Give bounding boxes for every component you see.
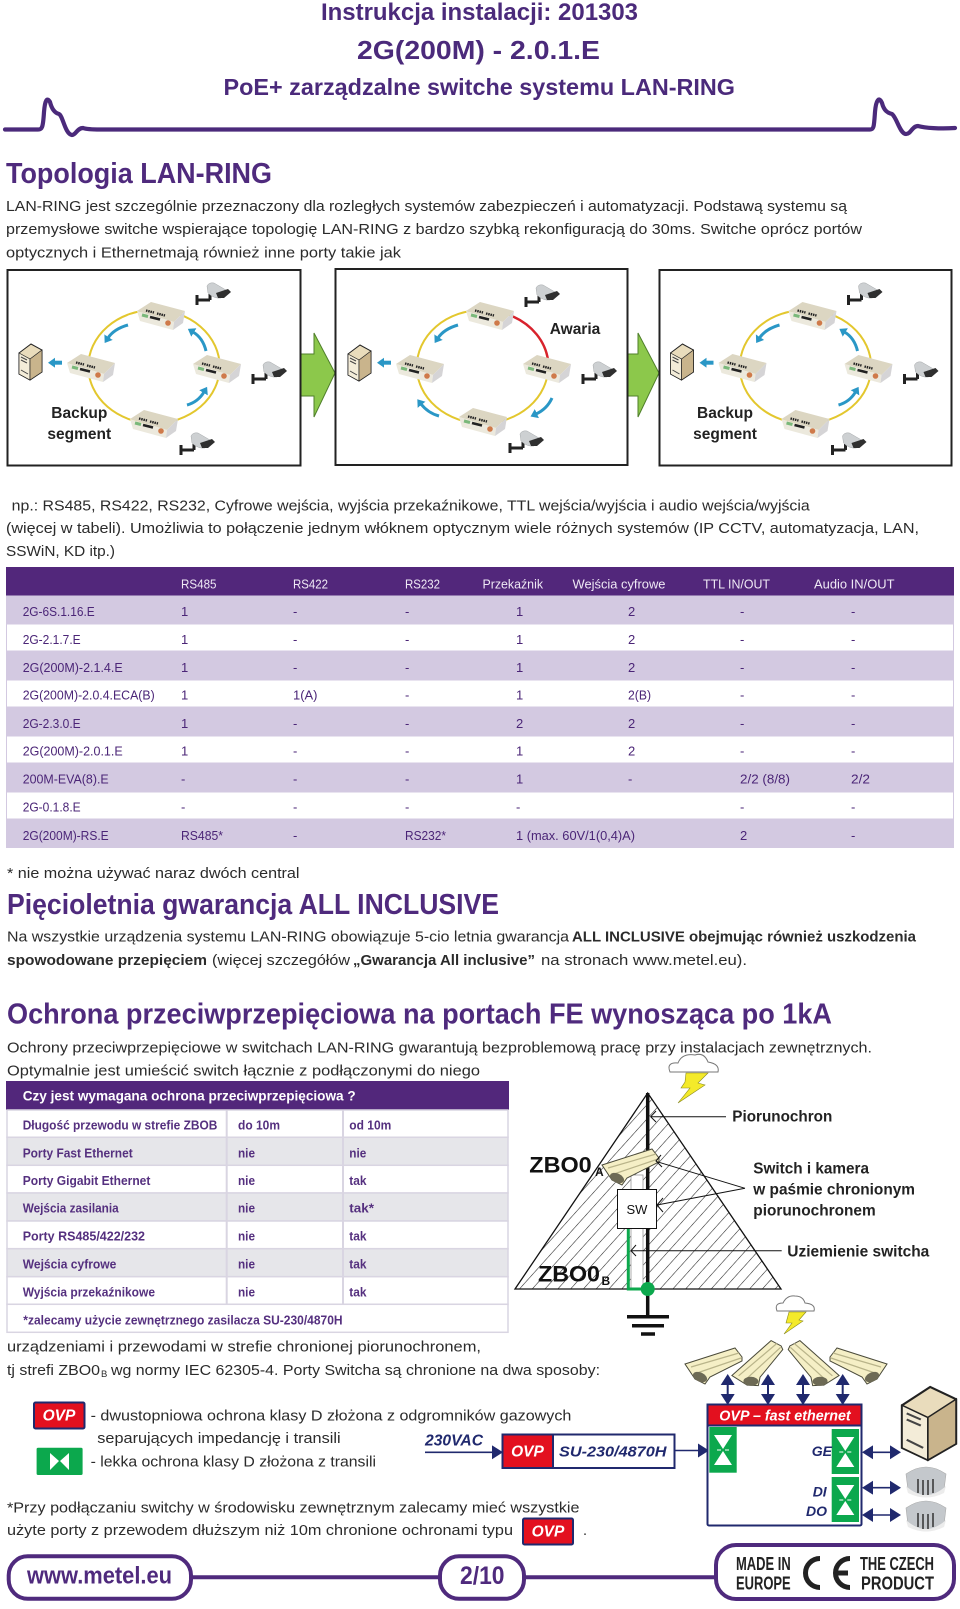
row 1: -: [740, 604, 744, 619]
label: ZBO0A: ZBO0: [529, 1152, 592, 1177]
grounding wire: [628, 1228, 655, 1296]
text block: zone description: B: [101, 1369, 107, 1380]
row 5: 2G-2.3.0.E: [23, 716, 81, 731]
row 8: -: [405, 800, 409, 814]
row 6: 2G(200M)-2.0.1.E: [23, 744, 123, 758]
row 2: 2G-2.1.7.E: [23, 632, 81, 647]
row 7: -: [628, 772, 632, 786]
row: cable length: [23, 1118, 391, 1132]
row: cable length: od 10m: [349, 1118, 391, 1132]
row: RS ports: nie: [238, 1230, 255, 1244]
row 4: -: [740, 688, 744, 702]
diagram: ring with switches: [19, 283, 287, 455]
arrows: cameras to switch: [728, 1376, 843, 1403]
footer: website: [9, 1556, 191, 1599]
row 8: -: [293, 800, 297, 814]
row 4: -: [405, 688, 409, 702]
row: power inputs: tak*: [349, 1202, 374, 1216]
row 7: -: [181, 772, 185, 786]
OVP fast ethernet band: OVP – fast ethernet: [719, 1408, 852, 1425]
power supply box: [502, 1434, 674, 1468]
row 5: -: [740, 716, 744, 731]
callout: switch and camera: [656, 1155, 915, 1220]
text block: ports: (więcej w tabeli). Umożliwia to połączenie jednym włóknem optycznym wiele różnych systemów (IP CCTV, automatyzacja, LAN,: [6, 521, 919, 537]
label: DI: DI: [813, 1484, 828, 1500]
row 1: [6, 596, 954, 624]
row 4: 2G(200M)-2.0.4.ECA(B): [23, 688, 155, 702]
text block: ports: [6, 498, 919, 560]
row 4: 1: [516, 688, 523, 702]
panel: ring normal: [8, 270, 300, 466]
label: GE: GE: [812, 1443, 833, 1459]
row: power inputs: [23, 1202, 374, 1216]
row 3: 2G(200M)-2.1.4.E: [23, 660, 123, 675]
text block: recommendation: [7, 1500, 587, 1544]
row 7: [6, 763, 954, 792]
icon: green GE: [832, 1429, 859, 1474]
text block: warranty: „Gwarancja All inclusive”: [353, 953, 535, 969]
row 1: -: [293, 604, 297, 619]
row 5: [6, 707, 954, 736]
table: port comparison: [6, 567, 954, 848]
icon: OVP inline: [523, 1518, 573, 1544]
text block: warranty: ALL INCLUSIVE obejmując również uszkodzenia: [572, 930, 917, 946]
row: digital inputs: tak: [349, 1257, 367, 1271]
text block: ports: np.: RS485, RS422, RS232, Cyfrowe wejścia, wyjścia przekaźnikowe, TTL wejścia/wyjścia i audio wejścia/wyjścia: [12, 498, 811, 514]
callout: switch and camera: w paśmie chronionym: [752, 1181, 915, 1198]
row: cable length: Długość przewodu w strefie ZBOB: [23, 1118, 217, 1132]
label: Awaria: Awaria: [550, 321, 601, 338]
row 2: -: [740, 632, 744, 647]
row 3: -: [851, 660, 855, 675]
row: relay outputs: tak: [349, 1285, 367, 1299]
arrows: side ports: [864, 1452, 899, 1515]
row: power inputs: nie: [238, 1202, 255, 1216]
heading: warranty: Pięcioletnia gwarancja ALL INCLUSIVE: [7, 889, 499, 921]
diagram: lightning protection zone: [515, 1054, 930, 1334]
switch box: [618, 1190, 656, 1228]
row: digital inputs: [23, 1257, 367, 1271]
table header: Czy jest wymagana ochrona przeciwprzepięciowa ?: [23, 1088, 356, 1104]
table header: [6, 1081, 509, 1110]
row 2: 2: [628, 632, 635, 647]
cloud and lightning top: [669, 1054, 718, 1103]
row 9: 2: [740, 828, 747, 843]
row 8: -: [851, 800, 855, 814]
label: ZBO0B: B: [602, 1274, 610, 1288]
text block: zone description: wg normy IEC 62305-4. Porty Switcha są chronione na dwa sposoby:: [110, 1363, 600, 1379]
cloud and lightning bottom: [776, 1296, 814, 1334]
row 9: 2G(200M)-RS.E: [23, 828, 109, 843]
diagram: ring with failed link: [348, 285, 617, 453]
row: fast ethernet: nie: [238, 1146, 255, 1160]
row 6: [6, 736, 954, 763]
legend text: OVP: - dwustopniowa ochrona klasy D złożona z odgromników gazowych: [91, 1409, 571, 1425]
row: gigabit ethernet: tak: [349, 1174, 367, 1188]
text block: intro: LAN-RING jest szczególnie przeznaczony dla rozległych systemów zabezpieczeń i automatyzacji. Podstawą systemu są: [6, 199, 848, 215]
row 3: 1: [516, 660, 523, 675]
table header: RS422: [293, 576, 328, 592]
row 6: -: [851, 744, 855, 758]
row 2: -: [851, 632, 855, 647]
row 5: 2: [516, 716, 523, 731]
callout: Piorunochron: Piorunochron: [732, 1109, 832, 1126]
row 4: -: [851, 688, 855, 702]
row: fast ethernet: nie: [349, 1146, 366, 1160]
row 5: -: [405, 716, 409, 731]
label: backup segment: segment: [47, 426, 111, 443]
hatched triangle: [515, 1093, 781, 1289]
row 1: 1: [516, 604, 523, 619]
icon: detector 1: [906, 1467, 946, 1498]
row 6: 2: [628, 744, 635, 758]
row: gigabit ethernet: [23, 1174, 367, 1188]
row 2: -: [293, 632, 297, 647]
label: ZBO0A: A: [595, 1165, 604, 1179]
table header: Przekaźnik: [482, 576, 543, 592]
row 8: -: [740, 800, 744, 814]
row: fast ethernet: Porty Fast Ethernet: [23, 1146, 133, 1160]
text block: ports: SSWiN, KD itp.): [6, 544, 115, 560]
row 8: [6, 792, 954, 819]
table: surge protection requirement: [6, 1081, 509, 1332]
row 8: -: [181, 800, 185, 814]
label: backup segment 2: segment: [693, 426, 757, 443]
text block: recommendation: użyte porty z przewodem dłuższym niż 10m chronione ochronami typu: [7, 1523, 513, 1539]
row 3: 1: [181, 660, 188, 675]
table header: Wejścia cyfrowe: [572, 576, 666, 592]
row: digital inputs: Wejścia cyfrowe: [23, 1257, 116, 1271]
row 3: -: [740, 660, 744, 675]
callout: switch and camera: piorunochronem: [753, 1203, 876, 1220]
row: relay outputs: nie: [238, 1285, 255, 1299]
label: backup segment 2: Backup: [697, 405, 753, 422]
heading: Topologia LAN-RING: Topologia LAN-RING: [6, 158, 272, 190]
row 2: 1: [181, 632, 188, 647]
label: backup segment: Backup: [51, 405, 107, 422]
row 2: [6, 624, 954, 651]
panel: ring reconfigured: [660, 270, 952, 466]
footer: made in Europe badge: MADE IN: [736, 1553, 791, 1574]
text block: surge protection: Optymalnie jest umieścić switch łącznie z podłączonymi do niego: [7, 1064, 480, 1080]
row 6: -: [740, 744, 744, 758]
table header: [6, 567, 954, 596]
arrow: green 1: [301, 333, 335, 417]
row 1: 1: [181, 604, 188, 619]
text block: warranty: na stronach www.metel.eu).: [541, 953, 747, 969]
row: fast ethernet: [23, 1146, 366, 1160]
row 5: 2: [628, 716, 635, 731]
table header: RS485: [181, 576, 216, 592]
row: relay outputs: Wyjścia przekaźnikowe: [23, 1285, 155, 1299]
footer: made in Europe badge: [716, 1545, 954, 1599]
header wave line: [5, 100, 955, 135]
row 7: 2/2: [851, 772, 870, 786]
text block: intro: optycznych i Ethernetmają również inne porty takie jak: [6, 246, 402, 262]
row 5: -: [851, 716, 855, 731]
table header: TTL IN/OUT: [703, 576, 770, 592]
row 2: -: [405, 632, 409, 647]
text block: surge protection: [7, 1040, 872, 1080]
row 1: -: [405, 604, 409, 619]
footer: page number: [440, 1556, 524, 1599]
legend: OVP: [34, 1402, 571, 1428]
row 4: 1: [181, 688, 188, 702]
callout: switch and camera: Switch i kamera: [753, 1160, 869, 1177]
arrow: input power: [425, 1451, 501, 1453]
icons: cameras row: [685, 1338, 887, 1394]
arrow: green 2: [628, 333, 659, 417]
lightning rod and ground: [627, 1093, 669, 1334]
table body background: [7, 1110, 508, 1332]
row 7: -: [405, 772, 409, 786]
row 2: 1: [516, 632, 523, 647]
footer: made in Europe badge: EUROPE: [736, 1572, 791, 1593]
label: DO: DO: [806, 1503, 827, 1519]
row 6: 1: [516, 744, 523, 758]
row: cable length: do 10m: [238, 1118, 280, 1132]
label: ZBO0B: ZBO0: [538, 1262, 600, 1287]
row: power inputs: Wejścia zasilania: [23, 1202, 120, 1216]
table header: RS232: [405, 576, 440, 592]
callout: Piorunochron: [651, 1109, 832, 1126]
row: table note: *zalecamy użycie zewnętrznego zasilacza SU-230/4870H: [23, 1314, 343, 1328]
diagram: switch protection block: [708, 1404, 862, 1526]
row 9: RS485*: [181, 828, 223, 843]
row 7: 2/2 (8/8): [740, 772, 790, 786]
text block: warranty: (więcej szczegółów: [212, 953, 351, 969]
icon: green transil: [37, 1448, 83, 1475]
footer: website: www.metel.eu: [26, 1562, 172, 1589]
icon: OVP: [34, 1402, 84, 1428]
row 4: 2(B): [628, 688, 651, 702]
text block: zone description: urządzeniami i przewodami w strefie chronionej piorunochronem,: [7, 1340, 481, 1356]
title: header: [224, 0, 735, 100]
switch box: SW: [627, 1202, 648, 1217]
row 9: [6, 819, 954, 848]
row: gigabit ethernet: nie: [238, 1174, 255, 1188]
power supply box: OVP: [511, 1444, 545, 1461]
row 1: 2: [628, 604, 635, 619]
text block: warranty: Na wszystkie urządzenia systemu LAN-RING obowiązuje 5-cio letnia gwarancja: [7, 930, 570, 946]
icon: camera: [602, 1149, 659, 1185]
row: RS ports: tak: [349, 1230, 367, 1244]
row 3: [6, 651, 954, 680]
title line 2: 2G(200M) - 2.0.1.E: [357, 35, 600, 65]
icon: OVP inline: OVP: [532, 1524, 565, 1540]
row 9: -: [293, 828, 297, 843]
arrow: power to switch: [675, 1450, 707, 1452]
title line 3: PoE+ zarządzalne switche systemu LAN-RING: [224, 74, 735, 100]
row 3: -: [293, 660, 297, 675]
text block: recommendation: .: [583, 1523, 587, 1539]
icon: green input: [709, 1427, 737, 1473]
row 7: 200M-EVA(8).E: [23, 772, 109, 786]
row: RS ports: [23, 1230, 367, 1244]
row 8: 2G-0.1.8.E: [23, 800, 81, 814]
power supply box: SU-230/4870H: [559, 1444, 668, 1461]
text block: zone description: [7, 1340, 600, 1380]
callout: grounding: [631, 1244, 930, 1261]
row: digital inputs: nie: [238, 1257, 255, 1271]
row 4: [6, 680, 954, 707]
row 6: -: [405, 744, 409, 758]
legend text: OVP continued: separujących impedancję i transili: [97, 1431, 341, 1447]
text block: surge protection: Ochrony przeciwprzepięciowe w switchach LAN-RING gwarantują bezproblemową pracę przy instalacjach zewnętrznych.: [7, 1040, 872, 1056]
row 4: 1(A): [293, 688, 318, 702]
row 1: -: [851, 604, 855, 619]
text block: intro: przemysłowe switche wspierające topologię LAN-RING z bardzo szybką rekonfiguracją do 30ms. Switche oprócz portów: [6, 222, 863, 238]
text block: recommendation: *Przy podłączaniu switchy w środowisku zewnętrznym zalecamy mieć wszystkie: [7, 1500, 580, 1516]
row 5: 1: [181, 716, 188, 731]
label: 230VAC: 230VAC: [424, 1433, 484, 1450]
row 1: 2G-6S.1.16.E: [23, 604, 95, 619]
row 9: RS232*: [405, 828, 446, 843]
diagram: ring after reconfiguration: [670, 283, 938, 455]
row 3: -: [405, 660, 409, 675]
row: relay outputs: [23, 1285, 367, 1299]
icon: computer: [902, 1387, 956, 1460]
row 6: -: [293, 744, 297, 758]
icon: green DI DO: [832, 1477, 859, 1522]
row 9: -: [851, 828, 855, 843]
row 7: 1: [516, 772, 523, 786]
row: RS ports: Porty RS485/422/232: [23, 1230, 145, 1244]
row 5: -: [293, 716, 297, 731]
footer: [9, 1545, 954, 1599]
callout: grounding: Uziemienie switcha: [787, 1244, 930, 1261]
text block: intro: [6, 199, 863, 262]
panel: ring failure: [336, 269, 628, 465]
icon: detector 2: [906, 1501, 946, 1532]
row 3: 2: [628, 660, 635, 675]
row 9: 1 (max. 60V/1(0,4)A): [516, 828, 635, 843]
text block: warranty: [7, 930, 917, 969]
row: gigabit ethernet: Porty Gigabit Ethernet: [23, 1174, 151, 1188]
text block: zone description: tj strefi ZBO0: [7, 1363, 100, 1379]
row 7: -: [293, 772, 297, 786]
table header: Audio IN/OUT: [814, 576, 895, 592]
icon: OVP: OVP: [43, 1408, 76, 1425]
footer: made in Europe badge: PRODUCT: [861, 1572, 935, 1593]
heading: surge protection: Ochrona przeciwprzepięciowa na portach FE wynosząca po 1kA: [7, 998, 832, 1030]
legend: light protection: [37, 1448, 376, 1475]
footer: page number: 2/10: [460, 1562, 504, 1590]
footnote: central: * nie można używać naraz dwóch central: [7, 866, 300, 882]
row 6: 1: [181, 744, 188, 758]
row 8: -: [516, 800, 520, 814]
text block: warranty: spowodowane przepięciem: [7, 953, 207, 969]
icon: CE mark: [806, 1558, 850, 1588]
legend text: light protection: - lekka ochrona klasy D złożona z transili: [91, 1455, 376, 1471]
